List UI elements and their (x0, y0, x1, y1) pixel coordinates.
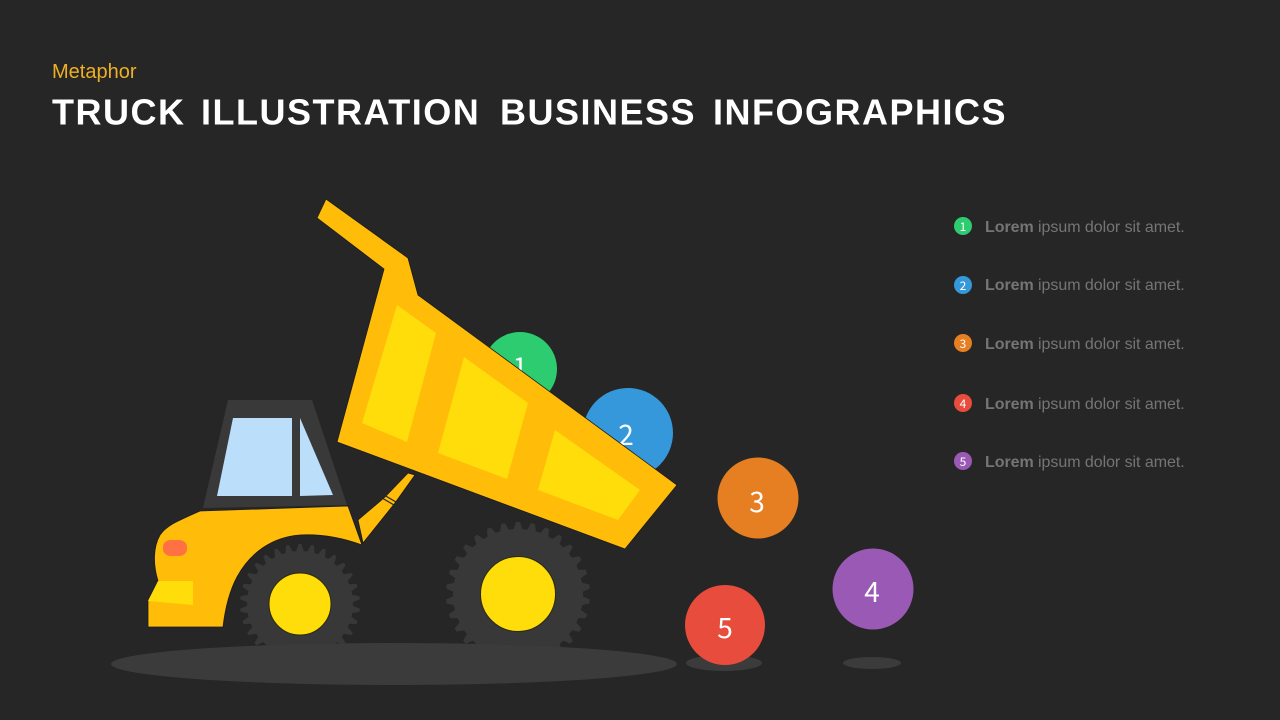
ball 3 (718, 458, 798, 538)
ball shadow 5 (686, 655, 762, 671)
ball 4: 4 (864, 571, 880, 611)
legend item 4: Lorem ipsum dolor sit amet. (985, 396, 1185, 413)
legend item 1: 1 (960, 218, 966, 235)
truck body (148, 506, 362, 627)
ball 1: 1 (513, 347, 527, 384)
hydraulic piston (358, 473, 415, 543)
bumper light (148, 581, 193, 605)
bed panel 3 (538, 430, 640, 520)
title: TRUCK (52, 92, 185, 132)
title: INFOGRAPHICS (713, 92, 1007, 132)
cab window side (300, 418, 333, 496)
legend item 2: Lorem ipsum dolor sit amet. (985, 277, 1185, 294)
legend item 5: Lorem ipsum dolor sit amet. (985, 454, 1185, 471)
ball 3: 3 (749, 481, 765, 521)
legend item 3: 3 (960, 335, 966, 352)
title: ILLUSTRATION (201, 92, 480, 132)
truck cab (203, 400, 347, 508)
ball 2 (583, 388, 673, 478)
subtitle: Metaphor (52, 61, 137, 83)
title: BUSINESS (500, 92, 696, 132)
bed panel 1 (362, 305, 436, 442)
legend item 2: 2 (960, 277, 967, 294)
ball 2: 2 (618, 414, 634, 454)
cab window front (217, 418, 292, 496)
headlight (163, 540, 187, 556)
rear wheel (446, 522, 590, 666)
legend item 3: Lorem ipsum dolor sit amet. (985, 336, 1185, 353)
front wheel (240, 544, 360, 664)
ground shadow (111, 643, 677, 685)
legend item 4: 4 (960, 395, 967, 412)
legend item 1: Lorem ipsum dolor sit amet. (985, 219, 1185, 236)
ball 1 (483, 332, 557, 406)
dump bed (317, 199, 677, 549)
legend item 5: 5 (960, 453, 967, 470)
ball 5 (685, 585, 765, 665)
ball shadow 4 (843, 657, 901, 669)
ball 4 (832, 548, 914, 630)
bed panel 2 (438, 357, 528, 479)
ball 5: 5 (717, 607, 733, 647)
